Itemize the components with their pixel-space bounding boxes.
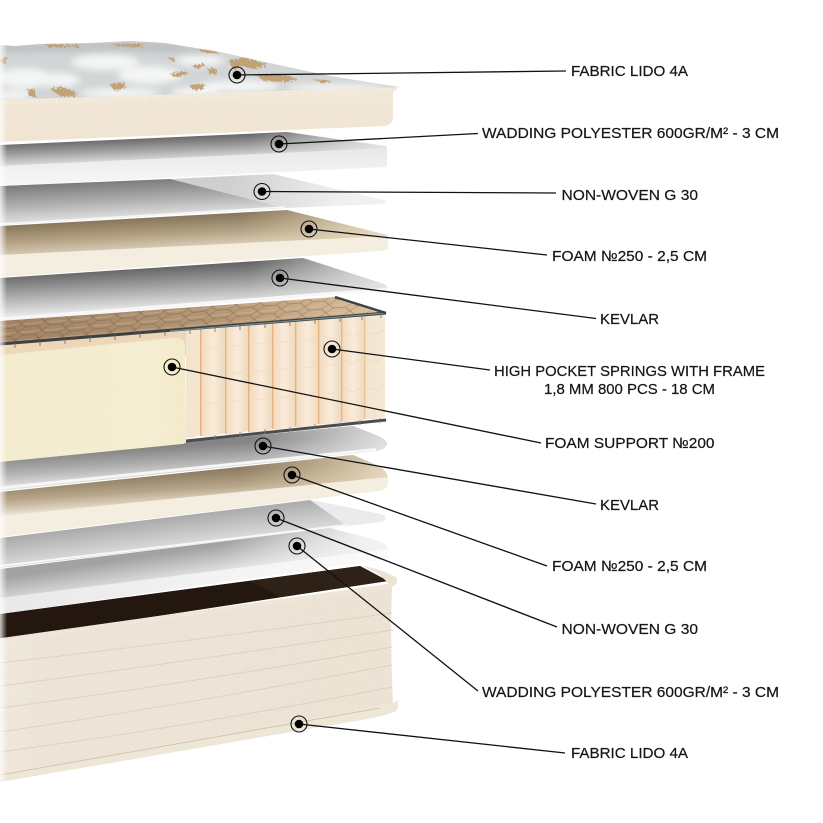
layer: non-woven lower [0,500,386,568]
marker [289,538,305,554]
bottom piping [0,700,398,782]
mattress base: fabric lido 4A [0,566,398,782]
dark inner cavity [0,566,388,640]
callout: Foam 250 lower [284,467,707,575]
rim [363,566,397,587]
label: NON-WOVEN G 30 [562,187,698,204]
leader [279,134,478,144]
label: WADDING POLYESTER 600GR/M² - 3 CM [482,684,779,701]
kevlar sheet [0,426,387,491]
callout: Fabric Lido 4A top [229,63,688,83]
leader [262,192,556,193]
callout: Wadding polyester lower [289,538,779,701]
callout: Fabric Lido 4A bottom [291,716,688,762]
layer: wadding polyester upper [0,132,387,186]
marker [164,359,180,375]
non-woven shaded sheet [0,179,285,225]
leader [292,475,547,566]
foam support panel [0,338,186,462]
leader [332,349,490,370]
foam side band [0,236,388,277]
top piping [0,585,392,640]
layer: wadding polyester lower [0,528,388,614]
bottom frame [186,418,386,441]
left edge fade [0,40,7,785]
marker [284,467,300,483]
marker [255,438,271,454]
callout: Kevlar lower [255,438,659,514]
spring columns [0,313,385,438]
label: FOAM SUPPORT №200 [545,435,714,452]
pocket springs with frame [0,297,386,441]
marker [254,184,270,200]
non-woven light corner [310,500,386,526]
marker [229,67,245,83]
label [494,363,765,398]
layer: foam 250 upper [0,210,388,277]
wadding top surface [0,132,387,168]
leader [172,367,541,443]
label: NON-WOVEN G 30 [562,621,698,638]
label: KEVLAR [600,497,659,514]
leader [263,446,596,504]
non-woven light corner [170,174,386,208]
marker [291,716,307,732]
gold pattern [0,44,332,97]
leader [297,546,478,691]
leader [309,229,547,255]
marker [272,270,288,286]
leader [276,518,557,627]
wadding side band [0,148,387,186]
leader [280,278,596,318]
callout: Non-woven upper [254,184,698,204]
callout: Kevlar upper [272,270,659,328]
layer: kevlar upper [0,258,388,321]
callout: Wadding polyester upper [271,125,779,152]
wadding top surface [0,528,388,600]
side band [0,87,399,142]
label: HIGH POCKET SPRINGS WITH FRAME [494,363,765,380]
foam side band [0,477,388,537]
label: FOAM №250 - 2,5 CM [552,558,707,575]
label: KEVLAR [600,311,659,328]
piping [0,90,393,102]
label: WADDING POLYESTER 600GR/M² - 3 CM [482,125,779,142]
leader [237,71,566,75]
marker [324,341,340,357]
label: FOAM №250 - 2,5 CM [552,248,707,265]
spring coil hints [205,329,384,404]
callout: Foam 250 upper [301,221,707,265]
top fabric lido 4A [0,38,402,142]
marker [271,136,287,152]
callout: Foam support [164,359,714,452]
marker [268,510,284,526]
kevlar sheet [0,258,388,321]
layer: non-woven upper [0,174,386,225]
spring top surface [0,297,385,345]
label: FABRIC LIDO 4A [571,745,688,762]
top frame [0,297,386,348]
marker [301,221,317,237]
layer: kevlar lower [0,426,387,491]
foam top surface [0,210,388,256]
quilted top [0,41,398,100]
label: 1,8 MM 800 PCS - 18 CM [544,381,715,398]
non-woven sheet [0,500,386,568]
quilting lines [0,613,392,752]
callout: High pocket springs [324,341,765,398]
base side body [0,585,393,776]
callout: Non-woven lower [268,510,698,638]
label: FABRIC LIDO 4A [571,63,688,80]
layer: foam 250 lower [0,455,388,537]
leader [299,724,565,753]
wadding side band [0,549,388,614]
foam top surface [0,455,388,518]
